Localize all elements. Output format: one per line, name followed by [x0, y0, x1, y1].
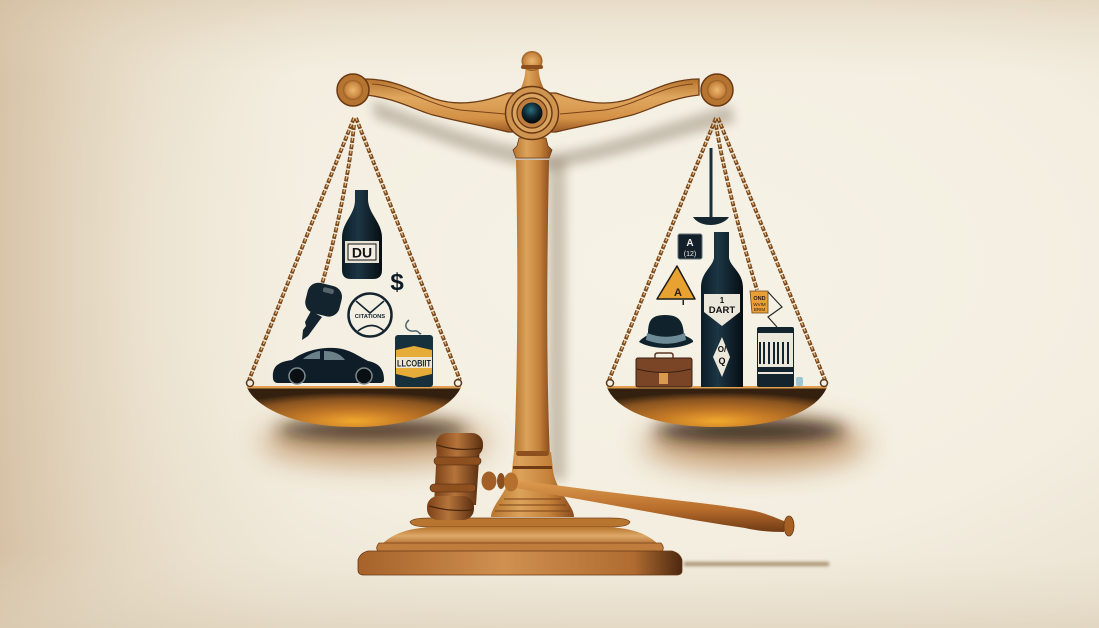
- icon: prohibition circle: [348, 294, 392, 336]
- right chains: [609, 118, 825, 380]
- gavel: [427, 433, 794, 536]
- icon: striped can: [757, 327, 803, 387]
- icon: warning triangle: [657, 266, 695, 305]
- icon: prohibition circle: CITATIONS: [355, 314, 385, 320]
- icon: wine bottle: O/: [718, 345, 727, 354]
- scale beam: [337, 51, 733, 140]
- icon: briefcase: [636, 353, 692, 387]
- icon: car key: [302, 280, 344, 340]
- icon: dollar sign: $: [390, 269, 404, 296]
- icon: orange tag: OND: [753, 296, 766, 302]
- icon: DUI bottle: DU: [352, 244, 372, 260]
- icon: wine bottle: Q: [718, 356, 726, 366]
- icon: hat: [639, 315, 693, 348]
- icon: dark sign: [678, 234, 702, 259]
- base stand: [358, 451, 682, 575]
- gavel head: [427, 433, 483, 520]
- icon: alcohol can: LLCOBIIT: [397, 358, 431, 370]
- gavel handle: [482, 472, 794, 536]
- icon: alcohol can: [395, 320, 433, 387]
- icon: car: [273, 348, 384, 384]
- left pan: [246, 380, 462, 427]
- center medallion: [506, 86, 558, 140]
- icon: wine bottle: DART: [709, 305, 735, 316]
- icon: wine bottle: 1: [720, 296, 725, 305]
- wall shadows: [260, 100, 867, 566]
- right pan: [606, 380, 828, 427]
- icon: orange tag: WVIM: [753, 302, 766, 307]
- icon: DUI bottle: [342, 190, 382, 279]
- right beam knob: [701, 74, 733, 106]
- scale post: [513, 138, 552, 460]
- icon: dark sign: A: [686, 238, 694, 249]
- icon: wine bottle: [701, 232, 743, 387]
- left beam knob: [337, 74, 369, 106]
- icon: small scale balance: [693, 148, 729, 225]
- icon: warning triangle: A: [674, 287, 682, 299]
- left chains: [249, 118, 460, 380]
- icon: orange tag: [750, 291, 782, 327]
- icon: orange tag: BRIM: [754, 307, 765, 312]
- icon: dark sign: (12): [684, 251, 696, 258]
